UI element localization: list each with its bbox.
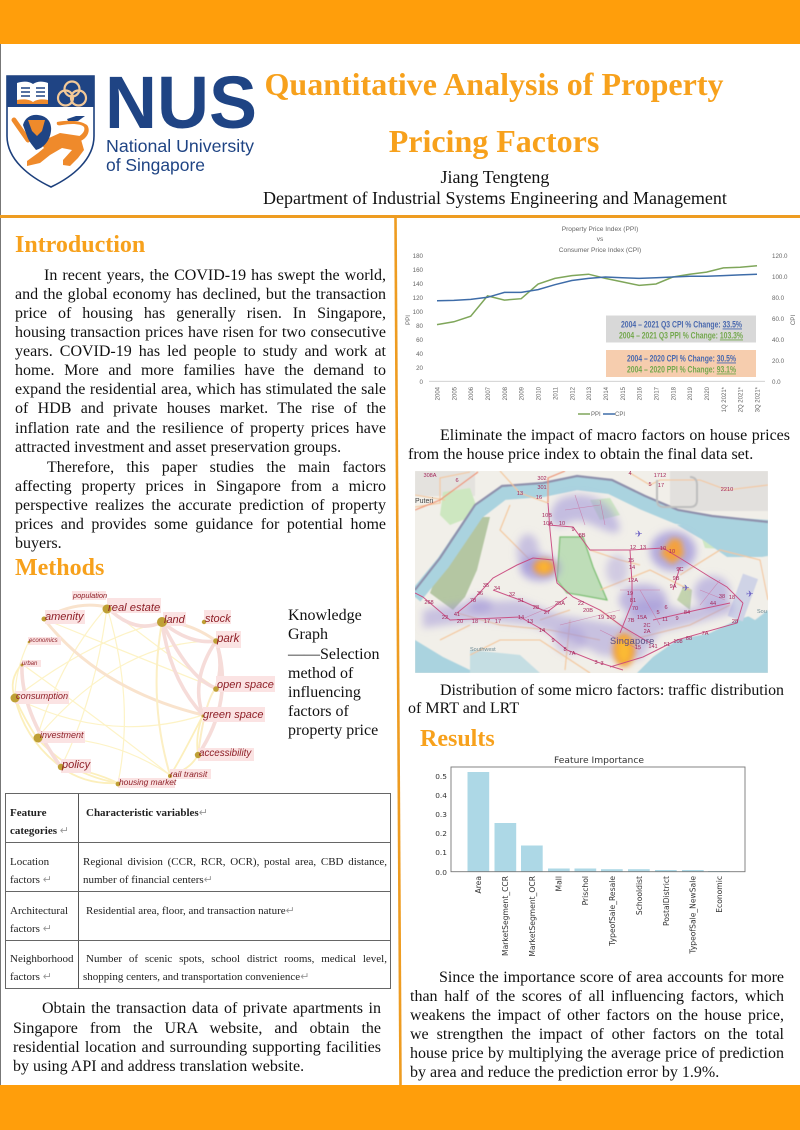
map labels: 51 [664, 642, 670, 648]
x labels: 2019 [688, 386, 694, 400]
knowledge graph: open space [217, 679, 274, 691]
map labels: 10 [559, 521, 565, 527]
text: data collection: residential location and surrounding supporting facilities [13, 1039, 381, 1056]
x axis labels: PostalDistrict [662, 876, 671, 926]
map labels: 18 [472, 619, 478, 625]
map labels: 12A [628, 578, 638, 584]
map labels: 19 [627, 591, 633, 597]
x axis labels: TypeofSale_NewSale [688, 876, 698, 955]
x axis labels: Economic [715, 876, 724, 913]
left axis: 0 [420, 379, 424, 386]
map labels: 10B [542, 513, 552, 519]
x axis labels [474, 875, 724, 957]
map labels: 15 [635, 645, 641, 651]
map labels: 81 [630, 598, 636, 604]
right axis: 120.0 [772, 253, 788, 260]
map labels: 19 [598, 615, 604, 621]
x axis labels: MarketSegment_CCR [501, 875, 510, 956]
heat: purple blobs [423, 495, 735, 660]
x labels: 2016 [638, 386, 644, 400]
table: feature categories: Neighborhood [10, 953, 74, 965]
map labels: 17 [658, 483, 664, 489]
right axis: 20.0 [772, 358, 785, 365]
left axis: 20 [416, 365, 424, 372]
text: knowledge graph caption: method of [288, 665, 353, 682]
table: feature categories: Location [10, 856, 49, 868]
map labels: 9 [571, 527, 575, 533]
title: Pricing Factors [389, 123, 599, 159]
x labels: 2014 [604, 386, 610, 400]
text: knowledge graph caption: Knowledge [288, 607, 362, 624]
graph edges [13, 605, 222, 783]
x axis labels: Area [474, 876, 483, 893]
knowledge graph: rail transit [170, 769, 208, 779]
text: introduction [15, 267, 386, 552]
map labels: 8 [563, 647, 567, 653]
map labels: 14 [518, 615, 524, 621]
map labels: 44 [710, 601, 716, 607]
map labels: 27 [544, 610, 550, 616]
map place names: Southwest [470, 647, 496, 653]
text: knowledge graph caption: ——Selection [288, 646, 380, 663]
text: introduction: of HDB and private houses market. The rise of the [15, 400, 386, 417]
x labels: 2018 [671, 386, 677, 400]
table: feature categories: shopping centers, and transportation convenience↵ [83, 971, 309, 983]
knowledge graph: green space [203, 709, 264, 721]
text: knowledge graph caption: property price [288, 722, 378, 739]
text: macro factors [408, 427, 790, 463]
text: results: weakens the impact of other factors on the house price, [410, 1007, 784, 1024]
bar chart: feature importance [435, 756, 746, 957]
map labels: 302 [537, 476, 547, 482]
x labels: 2Q 2021* [739, 386, 745, 412]
x labels: 2005 [452, 386, 458, 400]
left axis: 80 [416, 323, 424, 330]
text: introduction: affecting property prices in Singapore from a micro [15, 478, 386, 495]
map labels: 28 [732, 619, 738, 625]
header divider [0, 215, 800, 218]
callout: 2021 change: 2004 – 2021 Q3 PPI % Change: 103.3% [619, 330, 743, 340]
x axis labels: MarketSegment_OCR [528, 875, 537, 957]
knowledge graph [10, 591, 275, 788]
map labels: 88 [686, 636, 692, 642]
node labels [15, 591, 275, 788]
map labels: 11 [662, 617, 668, 623]
table: feature categories: Architectural [10, 905, 68, 917]
map labels: 7A [569, 651, 576, 657]
map labels: 7A [702, 631, 709, 637]
x labels: 2017 [654, 386, 660, 400]
line chart: PPI vs CPI [405, 226, 797, 418]
legend: CPI [615, 412, 625, 418]
map icons [635, 529, 754, 599]
y axis labels: 0.5 [435, 772, 447, 781]
knowledge graph: consumption [16, 691, 68, 701]
map labels: 3 [594, 660, 598, 666]
x labels: 2011 [553, 386, 559, 400]
left axis: 180 [413, 253, 424, 260]
map labels: 22 [578, 601, 584, 607]
x labels: 2004 [436, 386, 442, 400]
text: introduction: buyers. [15, 535, 62, 552]
text: introduction: home. More and more families have the demand to [15, 362, 386, 379]
map labels: 15 [628, 558, 634, 564]
text: data collection: Obtain the transaction data of private apartments in [42, 1000, 381, 1017]
legend [578, 412, 625, 418]
text: introduction: attracted investment and asset preservation groups. [15, 439, 341, 456]
knowledge graph: land [164, 614, 186, 626]
x labels: 2015 [621, 386, 627, 400]
map labels: 20B [583, 608, 593, 614]
text: introduction: Therefore, this paper studies the main factors [47, 459, 386, 476]
right axis: 80.0 [772, 295, 785, 302]
text: results: house price by multiplying the average price of prediction [410, 1045, 784, 1062]
map labels: 17 [484, 619, 490, 625]
right axis: CPI [790, 315, 797, 325]
y axis labels: 0.4 [435, 791, 447, 800]
text: results: Since the importance score of area accounts for more [439, 969, 784, 986]
text: micro factors [408, 682, 784, 717]
map place names: Puteri [415, 498, 434, 505]
map: traffic distribution [415, 471, 768, 673]
map labels: 5 [656, 610, 660, 616]
text: results [410, 969, 784, 1081]
map labels: 15A [637, 615, 647, 621]
map labels: 9B [673, 576, 680, 582]
x axis labels: Prischol [581, 876, 590, 905]
text: knowledge graph caption: factors of [288, 703, 349, 720]
y axis labels: 0.1 [435, 848, 447, 857]
line chart: PPI vs CPI: Property Price Index (PPI) [562, 226, 638, 233]
table: feature categories: factors ↵ [10, 874, 52, 886]
table: feature categories: factors ↵ [10, 971, 52, 983]
map labels: 1712 [654, 473, 666, 479]
x labels: 2009 [520, 386, 526, 400]
text: knowledge graph caption: influencing [288, 684, 361, 701]
callout: 2020 change: 2004 – 2020 CPI % Change: 30.5% [627, 354, 736, 364]
map labels: 34 [494, 586, 500, 592]
map labels: 38 [719, 594, 725, 600]
text: micro factors: of MRT and LRT [408, 700, 519, 717]
map labels: 17 [495, 619, 501, 625]
heading: Methods: Methods [15, 555, 104, 581]
x labels: 2007 [486, 386, 492, 400]
map labels: 308A [423, 473, 437, 479]
table: feature categories [5, 793, 391, 989]
text: macro factors: Eliminate the impact of macro factors on house prices [440, 427, 790, 444]
map place names [415, 498, 767, 653]
map icons: ✈ [635, 529, 643, 539]
title: Quantitative Analysis of Property [265, 66, 723, 102]
map labels: 13 [517, 491, 523, 497]
map icons: ✈ [682, 583, 690, 593]
x labels: 2020 [705, 386, 711, 400]
map labels: 10 [660, 546, 666, 552]
map labels: 9 [675, 616, 679, 622]
map place names: Sou [757, 609, 767, 615]
text: introduction: and the global economy has declined, but the transaction [15, 286, 386, 303]
x axis labels: Schooldist [635, 876, 644, 915]
y axis labels [435, 772, 447, 877]
logo: NUS [6, 70, 257, 188]
page frame edge [0, 44, 1, 1085]
y axis labels: 0.2 [435, 829, 447, 838]
map labels: 70 [632, 606, 638, 612]
map labels: 9A [670, 584, 677, 590]
land greens [440, 488, 476, 525]
map labels: 16 [536, 495, 542, 501]
heading: Introduction: Introduction [15, 232, 145, 258]
map place names: Singapore [610, 636, 655, 646]
right axis [772, 253, 797, 386]
map labels: 22 [442, 615, 448, 621]
map labels: 28 [533, 605, 539, 611]
map labels [423, 471, 738, 667]
header band [0, 0, 800, 44]
right axis: 100.0 [772, 274, 788, 281]
knowledge graph: real estate [108, 602, 160, 614]
shield [7, 76, 94, 187]
knowledge graph: population [72, 591, 107, 600]
map labels: 2A [644, 629, 651, 635]
map labels: 9C [676, 567, 684, 573]
text: data collection: by using API and address translation website. [13, 1058, 304, 1075]
text: introduction: housing transaction prices have risen for two consecutive [15, 324, 386, 341]
table: feature categories: factors ↵ [10, 923, 52, 935]
author: Jiang Tengteng [441, 167, 549, 187]
left axis: PPI [405, 315, 412, 325]
table: feature categories: number of financial centers↵ [83, 874, 213, 886]
left axis: 120 [413, 295, 424, 302]
table: feature categories: Number of scenic spots, school district rooms, medical level, [86, 953, 387, 965]
text: results: by area and reduce the prediction error by 1.9%. [410, 1064, 719, 1081]
text: introduction: prices and provides some guidance for potential home [15, 516, 386, 533]
map labels: 4 [628, 471, 632, 477]
callout: 2021 change [606, 316, 756, 342]
map labels: 20 [457, 619, 463, 625]
map labels: 268 [424, 600, 434, 606]
text: introduction: In recent years, the COVID-19 has swept the world, [44, 267, 386, 284]
text: data collection: Singapore from the URA website, and obtain the [13, 1020, 381, 1037]
map labels: 108 [673, 639, 683, 645]
map labels: 13 [640, 545, 646, 551]
routes [415, 503, 743, 670]
map labels: 14 [629, 565, 635, 571]
map labels: 2210 [721, 487, 733, 493]
x labels: 2010 [537, 386, 543, 400]
map labels: 301 [537, 485, 547, 491]
knowledge graph: policy [61, 759, 92, 771]
table: feature categories: Feature [10, 807, 46, 819]
roads [415, 471, 768, 673]
left axis: 40 [416, 351, 424, 358]
text: knowledge graph caption: Graph [288, 626, 328, 643]
x labels: 3Q 2021* [756, 386, 762, 412]
text: knowledge graph caption [288, 607, 380, 739]
x labels [436, 386, 762, 412]
right axis: 40.0 [772, 337, 785, 344]
callout: 2021 change: 2004 – 2021 Q3 CPI % Change: 33.5% [621, 320, 742, 330]
map labels: 84 [684, 610, 690, 616]
text: results: we strengthen the impact of other factors on the total [410, 1026, 784, 1043]
map labels: 7B [628, 618, 635, 624]
series: CPI [437, 274, 757, 301]
base map [415, 471, 768, 673]
legend: PPI [591, 412, 601, 418]
x labels: 2008 [503, 386, 509, 400]
table: feature categories: categories ↵ [10, 825, 69, 837]
text: introduction: expand the residential area, which has stimulated the sale [15, 381, 386, 398]
text: introduction: inflation rate and the resilience of property prices have [15, 420, 386, 437]
text: results: than half of the scores of all influencing factors, which [410, 988, 784, 1005]
map labels: 5 [648, 482, 652, 488]
x labels: 2012 [570, 386, 576, 400]
bar chart: feature importance: Feature Importance [554, 756, 644, 766]
left axis: 140 [413, 281, 424, 288]
knowledge graph: accessibility [199, 748, 252, 759]
left axis [405, 253, 424, 386]
map labels: 3 [600, 661, 604, 667]
left axis: 60 [416, 337, 424, 344]
x labels: 1Q 2021* [722, 386, 728, 412]
text: introduction: perspective realizes the accurate prediction of property [15, 497, 386, 514]
knowledge graph: park [216, 633, 241, 645]
map labels: 6 [455, 478, 459, 484]
map labels: 35 [483, 583, 489, 589]
map labels: 6 [664, 605, 668, 611]
text: introduction: years. COVID-19 has led people to study and work at [15, 343, 386, 360]
knowledge graph: housing market [119, 777, 177, 787]
knowledge graph: investment [40, 730, 84, 740]
map labels: 25A [555, 601, 565, 607]
knowledge graph: amenity [45, 611, 85, 623]
map labels: 10 [669, 549, 675, 555]
x axis labels: Mall [554, 876, 564, 891]
right axis: 60.0 [772, 316, 785, 323]
logo: NUS: of Singapore [106, 155, 205, 175]
y axis labels: 0.3 [435, 810, 447, 819]
map labels: 141 [648, 644, 658, 650]
map labels: 8B [579, 533, 586, 539]
title [265, 66, 724, 159]
water [415, 483, 768, 597]
x labels: 2013 [587, 386, 593, 400]
map labels: 12 [630, 545, 636, 551]
map labels: 31 [518, 598, 524, 604]
map labels: 41 [454, 612, 460, 618]
map labels: 14 [539, 628, 545, 634]
table: feature categories: Residential area, floor, and transaction nature↵ [86, 905, 295, 917]
map labels: 170 [606, 615, 616, 621]
map labels: 18 [729, 595, 735, 601]
y axis labels: 0.0 [435, 868, 447, 877]
series: PPI [437, 266, 757, 325]
callout: 2020 change [606, 350, 756, 377]
table: feature categories: Characteristic variables↵ [86, 807, 208, 819]
bars [468, 772, 730, 872]
callout: 2020 change: 2004 – 2020 PPI % Change: 93.1% [627, 364, 736, 374]
map labels: 78 [470, 598, 476, 604]
text: introduction: price of housing has generally risen. In Singapore, [15, 305, 386, 322]
left axis: 160 [413, 267, 424, 274]
text: macro factors: from the house price index to obtain the final data set. [408, 446, 753, 463]
knowledge graph: stock [205, 613, 231, 625]
map labels: 36 [477, 591, 483, 597]
x axis labels: TypeofSale_Resale [608, 876, 617, 947]
line chart: PPI vs CPI: Consumer Price Index (CPI) [559, 247, 641, 254]
left axis: 100 [413, 309, 424, 316]
map labels: 10A [543, 521, 553, 527]
right axis: 0.0 [772, 379, 781, 386]
map icons: ✈ [746, 589, 754, 599]
logo: NUS: National University [106, 136, 254, 156]
line chart: PPI vs CPI: vs [597, 236, 604, 243]
department: Department of Industrial Systems Engineering and Management [263, 188, 727, 208]
footer band [0, 1085, 800, 1130]
map labels: 9 [551, 638, 555, 644]
heat: orange spots [533, 538, 684, 667]
heading: Results: Results [420, 726, 495, 752]
text: data collection [13, 1000, 381, 1075]
map labels: 13 [527, 619, 533, 625]
text: micro factors: Distribution of some micro factors: traffic distribution [440, 682, 784, 699]
table: feature categories: Regional division (CCR, RCR, OCR), postal area, CBD distance, [83, 856, 387, 868]
x labels: 2006 [469, 386, 475, 400]
map labels: 2C [643, 623, 651, 629]
map labels: 32 [509, 592, 515, 598]
knowledge graph: urban [22, 661, 38, 667]
knowledge graph: economics [29, 638, 58, 644]
